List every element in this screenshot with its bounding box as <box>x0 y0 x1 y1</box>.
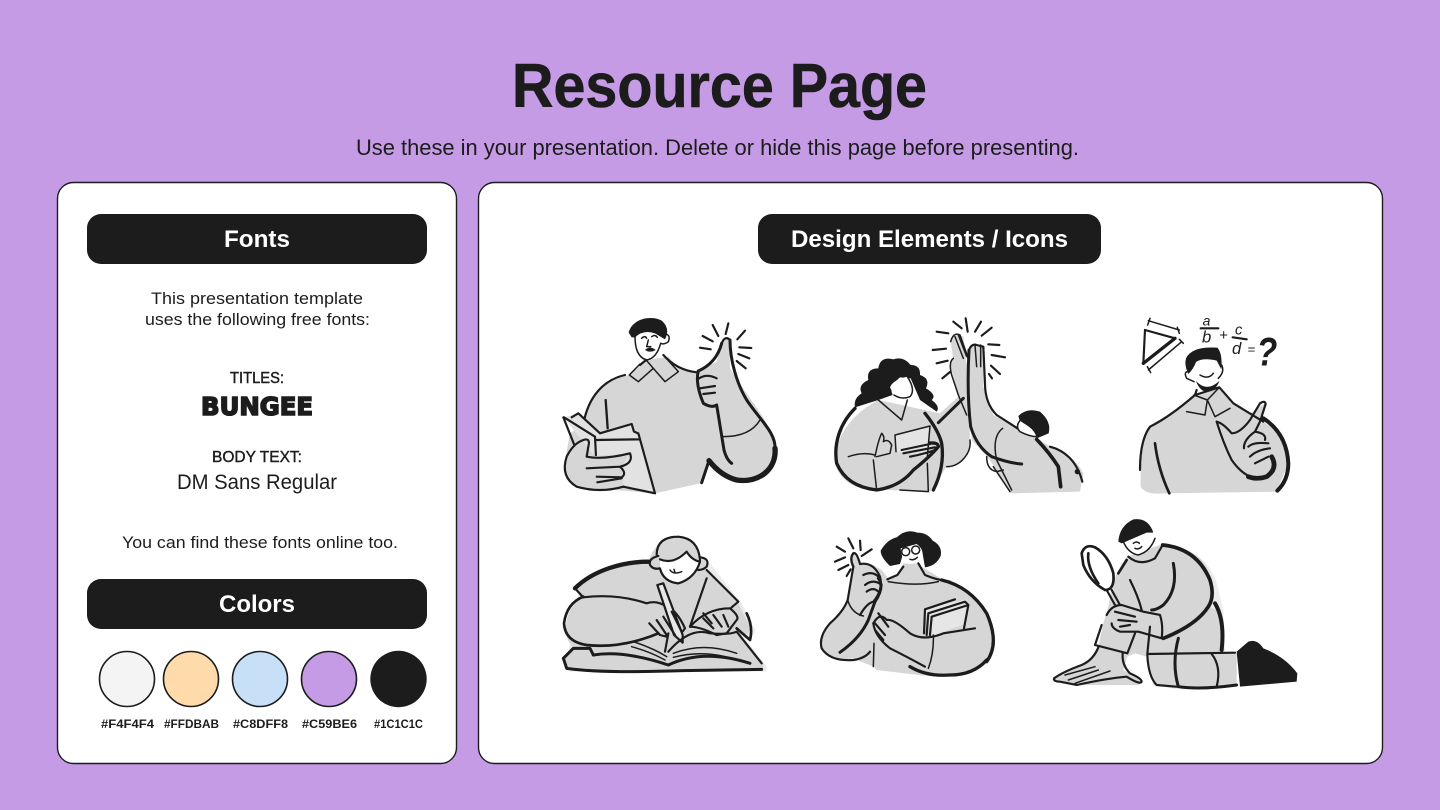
swatch: F4F4F4: #F4F4F4 <box>101 717 154 731</box>
heading: fonts <box>87 214 427 264</box>
handwritten formula: ? <box>1257 331 1277 375</box>
heading: design elements / icons: Design Elements / Icons <box>791 226 1068 253</box>
panel background <box>58 182 456 764</box>
heading: design elements / icons <box>758 214 1101 264</box>
handwritten formula: b <box>1202 328 1211 347</box>
swatch: C59BE6 <box>302 652 357 731</box>
title: Resource Page <box>512 52 927 121</box>
handwritten formula: a <box>1203 312 1211 328</box>
swatch: 1C1C1C <box>370 651 427 731</box>
handwritten formula: + <box>1219 328 1228 344</box>
text: fonts intro: This presentation template <box>151 289 363 308</box>
panel background <box>478 182 1382 764</box>
illustration: man thinking with math formula <box>1140 312 1288 494</box>
label: body text: BODY TEXT: <box>212 449 302 466</box>
swatch: 1C1C1C: #1C1C1C <box>374 717 423 731</box>
handwritten formula <box>1201 312 1277 375</box>
swatch: C8DFF8 <box>232 652 288 731</box>
illustration: person writing in a book <box>563 537 767 672</box>
font sample: Bungee: BUNGEE <box>201 392 313 421</box>
swatch: C8DFF8: #C8DFF8 <box>233 717 288 731</box>
swatch: F4F4F4 <box>100 652 154 731</box>
panel: fonts and colors <box>58 182 456 764</box>
swatch: FFDBAB <box>164 652 219 731</box>
heading: colors: Colors <box>219 591 295 618</box>
heading: fonts: Fonts <box>224 226 290 253</box>
heading: colors <box>87 579 427 629</box>
text: fonts online note: You can find these fonts online too. <box>122 533 398 552</box>
illustration: two people high five <box>835 318 1083 493</box>
illustration: woman with glasses holding books <box>821 531 993 677</box>
panel: design elements <box>478 182 1382 764</box>
illustration: kneeling person with magnifying glass <box>1054 519 1297 688</box>
swatch: C59BE6: #C59BE6 <box>302 717 357 731</box>
label: titles: TITLES: <box>230 370 284 387</box>
font sample: DM Sans: DM Sans Regular <box>177 471 337 494</box>
handwritten formula: = <box>1248 341 1256 356</box>
text: fonts intro: uses the following free fonts: <box>145 310 370 329</box>
handwritten formula: c <box>1235 322 1243 338</box>
illustration: man with book giving thumbs up <box>563 318 776 493</box>
subtitle: Use these in your presentation. Delete or hide this page before presenting. <box>356 135 1079 160</box>
handwritten formula: d <box>1232 339 1242 358</box>
swatch: FFDBAB: #FFDBAB <box>164 717 219 731</box>
text: fonts intro <box>145 289 370 329</box>
